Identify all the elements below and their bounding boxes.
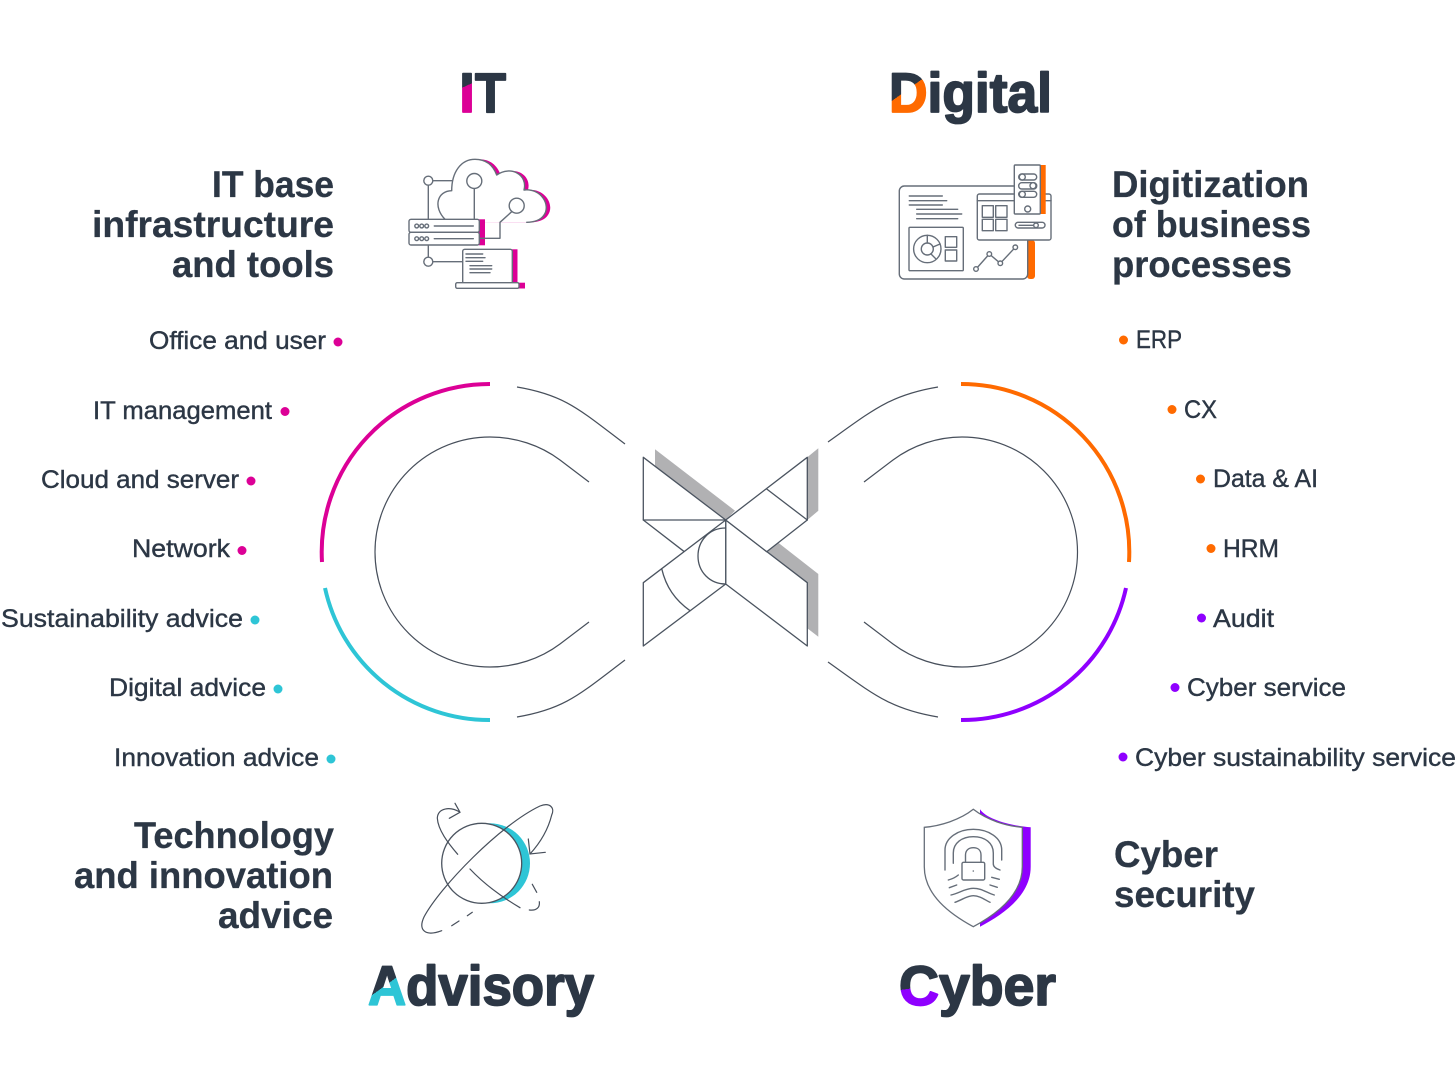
heading: Digitization of business processes: processes (1112, 244, 1292, 285)
heading: IT base infrastructure and tools: IT base (212, 164, 334, 205)
bullet list: digital services: HRM (1223, 535, 1279, 563)
logo: Digital: Digital (889, 61, 1052, 124)
icon: cloud and servers (409, 159, 550, 288)
infinity diagram: right loop (828, 384, 1129, 720)
heading: Technology and innovation advice: Technology (134, 815, 334, 856)
heading: Cyber security: Cyber (1114, 834, 1218, 875)
bullet list: advisory services: Sustainability advice (1, 605, 243, 633)
heading: Cyber security: security (1114, 874, 1255, 915)
bullet list: cyber services: Cyber sustainability service (1135, 744, 1456, 772)
heading: Technology and innovation advice: advice (218, 895, 333, 936)
heading: Cyber security (1114, 834, 1255, 915)
bullet list: cyber services: Audit (1213, 605, 1274, 633)
bullet list: digital services (1119, 326, 1318, 563)
logo: IT (459, 61, 506, 124)
bullet list: digital services: ERP (1136, 326, 1182, 354)
heading: Digitization of business processes (1112, 164, 1311, 285)
infinity diagram: central folded cross (643, 448, 818, 646)
icon: security shield (924, 809, 1031, 927)
bullet list: digital services: CX (1184, 396, 1217, 424)
logo: IT: T (475, 61, 506, 124)
icon: digital dashboard (899, 165, 1051, 279)
heading: IT base infrastructure and tools: infrastructure (92, 204, 334, 245)
heading: Digitization of business processes: of business (1112, 204, 1311, 245)
bullet list: digital services: Data & AI (1213, 465, 1318, 493)
heading: Digitization of business processes: Digitization (1112, 164, 1309, 205)
heading: IT base infrastructure and tools: and tools (172, 244, 334, 285)
logo: IT: I (459, 61, 475, 124)
heading: Technology and innovation advice (74, 815, 334, 936)
icon: orbiting planet (422, 803, 553, 933)
bullet list: IT services: IT management (93, 397, 272, 425)
bullet list: advisory services (1, 605, 336, 772)
logo: Cyber: Cyber (899, 954, 1056, 1017)
heading: IT base infrastructure and tools (92, 164, 334, 285)
bullet list: IT services: Office and user (149, 327, 326, 355)
logo: Advisory: Advisory (368, 954, 594, 1017)
bullet list: IT services (41, 327, 342, 563)
bullet list: IT services: Cloud and server (41, 466, 239, 494)
bullet list: advisory services: Innovation advice (114, 744, 319, 772)
bullet list: cyber services (1118, 605, 1456, 772)
bullet list: cyber services: Cyber service (1187, 674, 1346, 702)
infinity diagram: left loop (322, 384, 625, 720)
bullet list: IT services: Network (132, 535, 231, 563)
heading: Technology and innovation advice: and innovation (74, 855, 333, 896)
bullet list: advisory services: Digital advice (109, 674, 266, 702)
